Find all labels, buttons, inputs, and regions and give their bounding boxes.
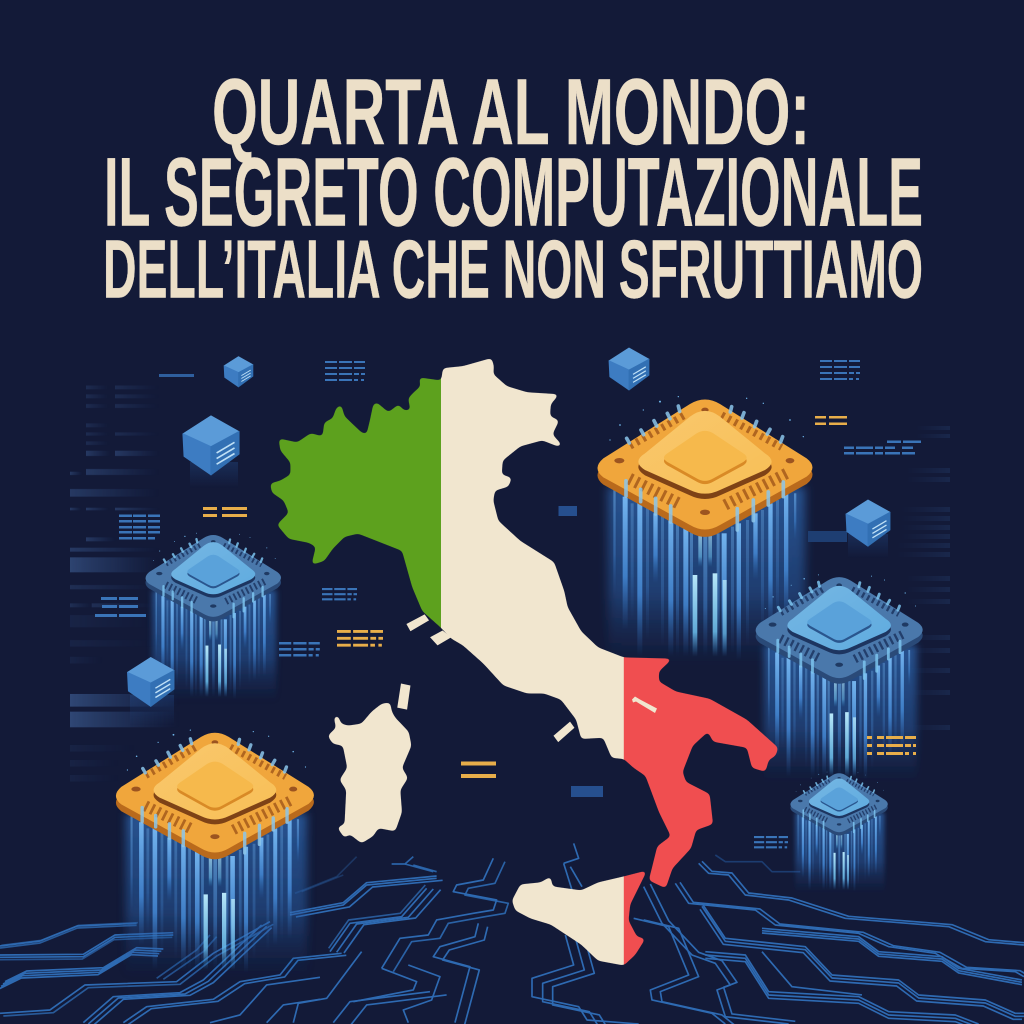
right blue chip	[756, 574, 923, 684]
faint data panel: right	[895, 426, 950, 730]
central Italy and Sicily: cream region	[441, 354, 624, 970]
gargano mark	[632, 696, 657, 713]
data marks: blue and yellow dashes	[95, 360, 921, 848]
icon: data cube right	[808, 500, 890, 558]
yellow lines in Tyrrhenian sea	[461, 762, 496, 778]
large gold chip	[597, 396, 812, 537]
map of Italy	[268, 354, 782, 970]
chip data drips: left blue	[152, 590, 276, 701]
circuit traces: bottom right	[532, 843, 1024, 1024]
faint data panel: left	[70, 385, 180, 782]
northern Italy: green region	[268, 370, 441, 632]
icon: data cube lower left	[128, 658, 174, 725]
southern Italy and eastern Sicily: red region	[624, 657, 778, 965]
blue block near Adriatic	[558, 506, 577, 516]
icon: small data cube top left	[224, 356, 253, 387]
small blue chip	[790, 772, 888, 836]
left blue chip	[146, 533, 281, 622]
blue block near Calabria	[571, 786, 603, 797]
circuit traces: bottom left	[0, 857, 508, 1024]
title	[103, 59, 923, 315]
chip data drips: lower gold	[126, 813, 307, 976]
icon: large data cube left	[183, 416, 239, 488]
lower gold chip	[116, 730, 314, 859]
chip data drips: right blue	[764, 645, 917, 782]
icon: data cube top center	[609, 348, 649, 390]
chip data drips: large gold	[608, 487, 805, 663]
sea data marks	[461, 506, 603, 797]
sardinia	[328, 702, 412, 842]
chip data drips: small blue	[795, 813, 884, 893]
small coastal islands	[397, 614, 574, 742]
